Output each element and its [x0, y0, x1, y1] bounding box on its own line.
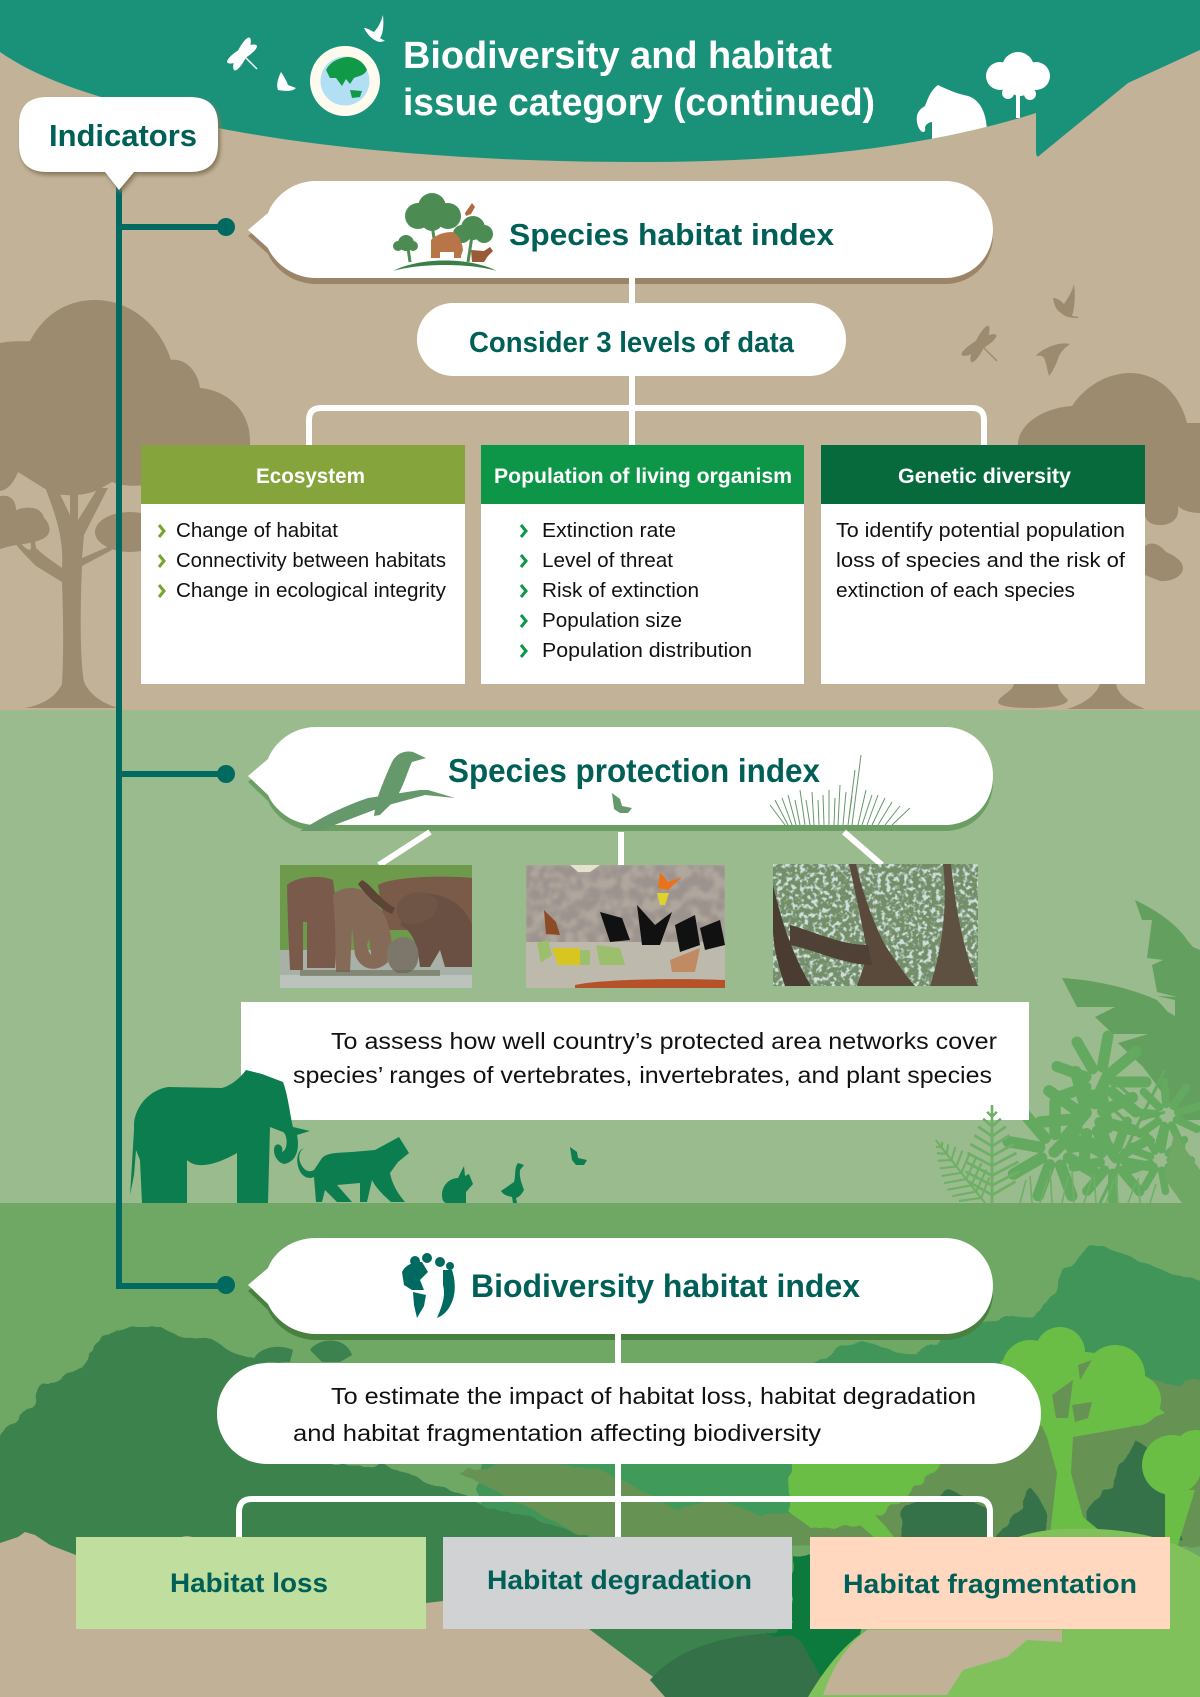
bracket: three levels: [309, 408, 984, 445]
panel: population of living organism: Population size: [542, 610, 682, 632]
title: Biodiversity and habitat: [403, 35, 832, 77]
foreground fern over text box: [966, 1105, 1018, 1203]
title: issue category (continued): [403, 82, 875, 124]
text box: protection index description: [241, 1002, 1029, 1120]
background: ferns and grass: [919, 1105, 1200, 1216]
background: rabbit silhouette: [442, 1166, 473, 1203]
background birds and dragonfly silhouettes: [959, 284, 1079, 376]
panel: genetic diversity: To identify potential population: [836, 520, 1125, 542]
icon: grass: [770, 755, 910, 825]
panel: genetic diversity: extinction of each species: [836, 580, 1075, 602]
panel: ecosystem: [141, 445, 465, 684]
box: habitat fragmentation: Habitat fragmentation: [843, 1569, 1137, 1599]
consider 3 levels pill: Consider 3 levels of data: [469, 327, 795, 359]
bracket: three habitat outcomes: [239, 1499, 990, 1537]
connector: bubble to levels pill: [629, 278, 635, 445]
pill: habitat description: To estimate the impact of habitat loss, habitat degradation: [331, 1383, 976, 1409]
icon: header bird: [364, 15, 385, 42]
pill: habitat description: [217, 1363, 1041, 1464]
background: tan section: [0, 0, 1200, 711]
panel: biodiversity habitat index bubble: [248, 1238, 993, 1340]
box: habitat loss: [76, 1537, 426, 1629]
panel: ecosystem: Change in ecological integrity: [176, 580, 446, 602]
panel: population of living organism: Risk of extinction: [542, 580, 699, 602]
background tree right: [998, 373, 1200, 709]
panel: population of living organism: Population distribution: [542, 640, 752, 662]
panel: population of living organism: Extinction rate: [542, 520, 676, 542]
title: [403, 35, 875, 124]
vertical indicator stem: [119, 185, 226, 1286]
header banner: [0, 0, 1200, 162]
icon: habitat trees and animals: [393, 193, 497, 271]
panel: biodiversity habitat index bubble: Biodiversity habitat index: [471, 1268, 860, 1304]
icon: header dragonfly: [225, 36, 259, 72]
background: goose silhouette: [501, 1163, 524, 1203]
background: elephant silhouette: [130, 1070, 310, 1203]
connector dot: biodiversity habitat: [217, 1276, 235, 1294]
icon: butterfly: [612, 793, 632, 813]
icon: globe badge: [310, 46, 380, 116]
box: habitat loss: Habitat loss: [170, 1568, 328, 1598]
consider 3 levels pill: [417, 303, 846, 376]
icon: bird on a branch: [300, 751, 455, 831]
box: habitat fragmentation: [810, 1537, 1170, 1629]
photo: elephants: [280, 865, 472, 988]
indicators callout: [19, 97, 220, 193]
panel: ecosystem: Change of habitat: [176, 520, 338, 542]
background tree left: [0, 300, 250, 708]
pill: habitat description: and habitat fragmentation affecting biodiversity: [293, 1420, 821, 1446]
panel: genetic diversity: [821, 445, 1145, 684]
panel: population of living organism: Level of threat: [542, 550, 673, 572]
background: banana leaves: [1062, 900, 1200, 1120]
photo: tree canopy: [773, 864, 978, 986]
connector dot: species protection: [119, 765, 235, 783]
panel: genetic diversity: Genetic diversity: [898, 465, 1071, 488]
background: fan palms: [992, 1036, 1200, 1215]
panel: population of living organism: [481, 445, 804, 684]
background: light green section: [0, 710, 1200, 1203]
panel: population of living organism: Population of living organism: [494, 465, 792, 488]
panel: ecosystem: Connectivity between habitats: [176, 550, 446, 572]
panel: species habitat index bubble: [248, 181, 993, 284]
icon: header butterfly: [277, 72, 296, 91]
panel: species habitat index bubble: Species habitat index: [509, 217, 835, 252]
panel: genetic diversity: loss of species and the risk of: [836, 550, 1125, 572]
box: habitat degradation: Habitat degradation: [487, 1565, 752, 1595]
panel: species protection index bubble: [248, 727, 993, 831]
panel: species protection index bubble: Species protection index: [448, 752, 821, 789]
icon: earth with trees: [402, 1253, 455, 1318]
panel: ecosystem: Ecosystem: [256, 465, 365, 488]
text box: protection index description: species’ ranges of vertebrates, invertebrates, and plant species: [293, 1062, 992, 1088]
photo: butterflies: [526, 865, 725, 988]
indicators callout: Indicators: [49, 118, 197, 153]
text box: protection index description: To assess how well country’s protected area networks cover: [331, 1028, 997, 1054]
box: habitat degradation: [443, 1537, 792, 1629]
icon: header tree: [986, 52, 1050, 118]
connectors: protection bubble to photos: [379, 832, 882, 865]
background: tiger silhouette: [297, 1137, 409, 1202]
background: green section with forest layers: [0, 1203, 1200, 1697]
icon: header elephant: [917, 85, 987, 145]
connector dot: species habitat: [119, 218, 235, 236]
connector: biodiversity bubble to boxes: [615, 1334, 621, 1537]
background: butterfly silhouette: [570, 1147, 587, 1165]
